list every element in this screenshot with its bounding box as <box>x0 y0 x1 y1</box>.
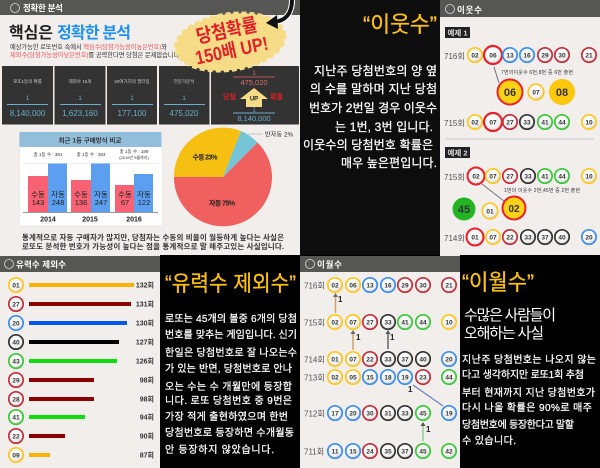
ball row: round 714: 22 <box>506 234 514 242</box>
bar chart: recent first-prize purchase method: 2014 <box>40 216 56 224</box>
pie chart: manual vs auto share: 수동 23% <box>192 154 218 162</box>
ball row: 711: 45 <box>419 448 427 456</box>
bar chart: recent first-prize purchase method: 총 1등 수 : 189 <box>120 148 149 155</box>
row: 40 <box>9 335 154 349</box>
callout: 150 times up starburst <box>172 7 288 77</box>
bar chart: recent first-prize purchase method <box>20 132 162 226</box>
ball row: 714: 20 <box>445 356 453 364</box>
row: 43: 43 <box>12 358 20 366</box>
header bar <box>0 256 160 272</box>
highlighted balls: 06 07 08: 06 <box>504 87 516 99</box>
pie chart: manual vs auto share <box>174 128 294 226</box>
ball row: 712 <box>304 406 456 420</box>
row: 41 <box>9 410 154 424</box>
ball row: round 714: 07 <box>489 234 497 242</box>
arrow: 45 repeat <box>420 422 431 441</box>
arrow: 07 repeat <box>350 330 361 350</box>
row: 27: 27 <box>12 302 20 308</box>
arrow: 45 repeat: 1 <box>426 425 431 434</box>
heading: 정확한 분석 <box>57 24 131 42</box>
row: 01: 01 <box>12 282 20 290</box>
ball row: 713: 05 <box>349 374 357 382</box>
ball row: round 714: 01 <box>471 234 479 242</box>
row: 20: 20 <box>12 320 20 328</box>
stat card: odds up <box>211 66 299 124</box>
body text: 수 있습니다. <box>462 435 516 447</box>
summary text: 로또도 분석한 번호가 가능성이 높다는 점을 통계적으로 말 해주고있는 사실입니다. <box>22 241 284 251</box>
stat card: odds up: 확률 <box>270 92 283 101</box>
ball row: 713: 18 <box>384 374 392 382</box>
body text: 다고 생각하지만 로또1회 추첨 <box>462 368 584 381</box>
body text: 가 있는 반면, 당첨번호로 안나 <box>165 363 292 375</box>
ball row: round 715 example 2: 44 <box>558 174 566 180</box>
ball row: round 715: 44 <box>558 120 566 126</box>
header bar <box>0 0 300 15</box>
ball row: round 715: 33 <box>523 120 531 126</box>
chart heading: 최근 1등 구매방식 비교 <box>59 136 121 144</box>
callout: 150 times up starburst: 당첨확률 <box>194 14 259 48</box>
body text: 니다. 로또 당첨번호 중 9번은 <box>165 395 292 407</box>
ball row: round 714: 37 <box>541 234 549 242</box>
body text <box>303 64 437 170</box>
highlighted balls: 45 01 02: 01 <box>486 208 494 216</box>
body text: 로또는 45개의 볼중 6개의 당첨 <box>165 313 297 325</box>
stat card: odds up: 1 <box>252 71 256 77</box>
arrow: 07 repeat: 1 <box>356 333 361 342</box>
ball row: 716: 13 <box>366 282 374 290</box>
row: 40: 127회 <box>136 338 154 346</box>
ball row: 716: 02 <box>331 282 339 290</box>
body text: 번호를 맞추는 게임입니다. 신기 <box>165 328 297 341</box>
ball row: 716: 16 <box>384 282 392 290</box>
subheading: 수많은 사람들이 <box>464 307 556 324</box>
heading: 핵심은 <box>9 23 53 42</box>
stat card: lotto 1st odds: 로또1등의 확률 <box>13 78 42 85</box>
row: 27 <box>9 297 154 311</box>
ball row: 715: 27 <box>366 320 374 326</box>
ball row: 712: 31 <box>384 410 392 418</box>
ball row: 714 <box>304 352 456 366</box>
ball row: round 715 example 2: 07 <box>489 174 497 180</box>
arrow: up: UP <box>250 96 258 102</box>
stat card: 15 excluded numbers: 1,623,160 <box>62 109 98 118</box>
badge: example 1 <box>445 27 470 38</box>
ball row: 716: 30 <box>419 282 427 290</box>
body text: 다시 나올 확률은 90%로 매주 <box>462 402 592 414</box>
body text: 안 등장하지 않았습니다. <box>165 443 274 456</box>
body text: 당첨번호로 등장하면 수개월동 <box>165 426 294 439</box>
ball row: round 716: 716회 <box>444 52 465 61</box>
body text: 오는 수는 수 개월만에 등장합 <box>165 381 292 393</box>
ball row: 713: 44 <box>445 374 453 382</box>
ball row: 714: 01 <box>331 356 339 364</box>
highlighted balls: 45 01 02: 45 <box>458 204 470 216</box>
body text: 지난주 당첨번호는 나오지 않는 <box>462 354 596 366</box>
ball row: 712: 17 <box>331 410 339 418</box>
heading <box>9 23 131 42</box>
intro text: 예상가능한 로또번호 속에서 핵심수(당첨가능성이높은번호)와 <box>10 42 167 51</box>
row: 09: 87회 <box>140 450 154 460</box>
body text: 매우 높은편입니다. <box>341 156 437 170</box>
stat card: 50 filters: 1 <box>130 95 134 102</box>
ball row: 715: 10 <box>445 320 453 326</box>
body text: 부터 현재까지 지난 당첨번호가 <box>462 387 595 399</box>
ball row: 714: 40 <box>419 356 427 364</box>
ball row: 716: 716회 <box>304 282 325 290</box>
bar chart: recent first-prize purchase method: 수동 <box>74 190 88 199</box>
row: 22: 90회 <box>140 432 154 440</box>
ball row: 711: 42 <box>445 448 453 456</box>
bar chart: recent first-prize purchase method: 248 <box>52 198 64 207</box>
summary text: 통계적으로 자동 구매자가 많지만, 당첨자는 수동의 비율이 월등하게 높다는 사실은 <box>22 232 284 242</box>
ball row: round 716 <box>444 46 596 64</box>
header bar: 이월수 <box>317 260 342 270</box>
body text: 한일은 당첨번호로 잘 나오는수 <box>165 347 297 359</box>
ball row: 712: 33 <box>401 410 409 418</box>
row: 09: 09 <box>12 452 20 460</box>
subheading <box>464 307 556 342</box>
ball row: 711: 711회 <box>304 448 324 456</box>
panel: repeat number balls <box>300 255 460 468</box>
arrow: 19 repeat: 1 <box>408 385 413 394</box>
badge: example 2: 예제 2 <box>447 148 468 158</box>
stat card: expert analysis: 전문가분석 <box>174 78 194 85</box>
ball row: 711: 11 <box>332 448 339 456</box>
stat card: odds up: 8,140,000 <box>237 114 271 123</box>
subheading: 오해하는 사실 <box>464 325 544 342</box>
intro text <box>10 42 181 59</box>
badge: example 2 <box>445 147 470 158</box>
stat card: expert analysis: 1 <box>182 95 186 102</box>
row: 27: 131회 <box>136 300 154 308</box>
row: 09 <box>9 448 154 462</box>
ball row: 714: 07 <box>349 356 357 364</box>
row: 40: 40 <box>12 340 20 346</box>
row: 28: 28 <box>12 396 20 404</box>
ball row: round 716: 16 <box>523 52 531 60</box>
ball row: 714: 37 <box>401 356 409 364</box>
stat card: lotto 1st odds: 8,140,000 <box>10 109 46 118</box>
ball row: 715: 07 <box>349 320 357 326</box>
ball row: 715: 715회 <box>304 318 325 328</box>
row: 29: 98회 <box>140 376 154 384</box>
row: 20: 130회 <box>136 318 154 328</box>
connector line <box>482 184 504 201</box>
body text <box>165 313 297 456</box>
stat card: expert analysis: 475,020 <box>170 109 199 118</box>
ball row: 713: 23 <box>419 374 427 382</box>
ball row: 712: 19 <box>445 410 453 418</box>
highlighted balls: 45 01 02: 02 <box>508 204 520 215</box>
highlighted balls: 06 07 08 <box>498 79 575 105</box>
ball row: 711: 24 <box>366 448 374 456</box>
heading: “이월수” <box>462 270 534 295</box>
body text: 가장 적게 출현하였으며 한번 <box>165 410 288 423</box>
ball row: round 716: 30 <box>558 52 566 60</box>
ball row: round 715 example 2: 10 <box>585 174 593 180</box>
bar chart: recent first-prize purchase method: 자동 <box>51 190 65 199</box>
bar chart: recent first-prize purchase method: 수동 <box>118 190 132 199</box>
ball row: 715: 02 <box>331 320 339 326</box>
ball row: 712: 45 <box>419 410 427 418</box>
ball row: round 715 example 2 <box>444 168 596 184</box>
row: 28 <box>9 392 154 406</box>
ball row: 716 <box>304 278 456 292</box>
panel: strong excluded numbers text <box>160 256 300 468</box>
stat card: 50 filters: 50여가지의 필터링 <box>114 78 150 85</box>
bar chart: recent first-prize purchase method: 143 <box>32 198 44 207</box>
heading: “유력수 제외수” <box>165 271 296 296</box>
highlighted balls: 45 01 02 <box>452 196 526 220</box>
row: 29 <box>9 373 154 387</box>
panel: neighbour number text <box>300 0 440 255</box>
row: 29: 29 <box>12 378 20 384</box>
body text: 번호가 2번일 경우 이웃수 <box>309 101 437 115</box>
pie chart: manual vs auto share: 자동 75% <box>209 198 236 208</box>
header bar: 이웃수 <box>457 5 482 15</box>
ball row: 713 <box>304 370 456 384</box>
ball row: round 714 <box>444 228 596 246</box>
panel: repeat number text <box>460 256 600 468</box>
ball row: round 715 example 2: 715회 <box>444 173 465 182</box>
header bar: 유력수 제외수 <box>16 260 66 270</box>
ball row: round 716: 13 <box>506 52 514 60</box>
body text: 는 1번, 3번 입니다. <box>335 120 433 134</box>
ball row: 713: 19 <box>401 374 409 382</box>
stat card: expert analysis <box>159 66 210 124</box>
row: 22: 22 <box>12 434 20 440</box>
arrow: 33 repeat <box>386 330 395 349</box>
bar chart: recent first-prize purchase method: 67 <box>121 198 129 207</box>
header bar <box>300 256 460 272</box>
stat card: 50 filters: 177,100 <box>118 109 147 118</box>
ball row: round 715 example 2: 02 <box>472 174 480 180</box>
ball row: 714: 22 <box>366 356 374 364</box>
arrow: 02 repeat <box>333 293 343 313</box>
connector line <box>494 67 499 83</box>
stat card: 50 filters <box>107 66 157 124</box>
ball row: round 715: 10 <box>585 120 593 126</box>
ball row: 711: 37 <box>401 448 409 456</box>
ball row: round 715 example 2: 33 <box>524 174 532 180</box>
bar chart: recent first-prize purchase method: 122 <box>138 198 150 207</box>
row: 43 <box>9 354 154 368</box>
ball row: round 715 <box>444 113 596 131</box>
chart heading <box>20 132 162 147</box>
ball row: 715: 33 <box>384 320 392 326</box>
ball row: 714: 33 <box>384 356 392 364</box>
ball row: 716: 29 <box>401 282 409 290</box>
body text <box>462 354 596 447</box>
body text: 이웃수의 당첨번호 확률은 <box>303 138 433 152</box>
ball row: 716: 21 <box>445 282 453 290</box>
panel: neighbour number examples <box>440 0 600 255</box>
ball row: round 714: 714회 <box>444 234 465 243</box>
ball row: 713: 15 <box>366 374 374 382</box>
highlighted balls: 06 07 08: 07 <box>532 90 540 96</box>
ball row: 712: 20 <box>349 410 357 418</box>
ball row: round 714: 20 <box>585 234 593 242</box>
arrow: curved black <box>266 0 292 29</box>
row: 41: 41 <box>12 414 20 422</box>
pie chart: manual vs auto share: 반자동 2% <box>265 130 294 138</box>
ball row: round 715: 41 <box>541 120 549 126</box>
arrow: 19 repeat <box>408 385 443 406</box>
stat card: 15 excluded numbers: 제외수 15개 <box>69 78 91 85</box>
panel: strong excluded numbers chart <box>0 255 160 468</box>
stat card: 15 excluded numbers <box>54 66 106 124</box>
ball row: 712: 712회 <box>304 410 325 418</box>
row: 22 <box>9 429 154 443</box>
stat card: odds up: 당첨 <box>223 92 236 101</box>
ball row: round 714: 40 <box>558 234 566 242</box>
highlighted balls: 06 07 08: 08 <box>556 87 568 99</box>
heading: “이웃수” <box>363 12 437 37</box>
stat card: 15 excluded numbers: 1 <box>78 95 82 102</box>
ball row: round 715: 715회 <box>444 119 465 128</box>
stat card: lotto 1st odds <box>2 66 53 124</box>
ball row: round 716: 02 <box>471 52 479 60</box>
body text: 의 수를 말하며 지난 당첨 <box>310 82 437 96</box>
row: 28: 98회 <box>140 394 154 404</box>
stat card: odds up: 1 <box>252 108 256 114</box>
bar chart: recent first-prize purchase method: 총 1등 수 : 383 <box>77 151 106 158</box>
intro text: 제외수(당첨가능성이낮은번호)를 공략한다면 당첨은 문제없습니다. <box>10 50 181 59</box>
stat card: odds up: 475,020 <box>240 78 268 87</box>
ball row: 714: 714회 <box>304 356 325 364</box>
ball row: round 716: 06 <box>489 52 497 60</box>
ball row: 711: 15 <box>349 448 357 456</box>
ball row: round 714: 33 <box>524 234 532 242</box>
stat card: lotto 1st odds: 1 <box>26 95 30 102</box>
ball row: 711 <box>304 444 456 458</box>
ball row: 711: 35 <box>384 448 392 456</box>
ball row: 715 <box>304 315 456 329</box>
note: example 2: 1번의 이웃수 2번,45번 중 2번 출현 <box>504 187 580 194</box>
row: 41: 94회 <box>140 412 154 422</box>
body text: 당첨번호에 등장한다고 말할 <box>462 419 574 431</box>
bar chart: recent first-prize purchase method: 2016 <box>126 216 142 224</box>
body text: 지난주 당첨번호의 양 옆 <box>314 64 437 78</box>
row: 01 <box>9 278 154 292</box>
bar chart: recent first-prize purchase method: 136 <box>75 198 87 207</box>
bar chart: recent first-prize purchase method: (2016년 5월까지) <box>119 154 149 160</box>
ball row: 715: 44 <box>419 320 427 326</box>
ball row: 712: 30 <box>366 410 374 418</box>
row: 20 <box>9 316 154 330</box>
header bar <box>440 0 600 17</box>
ball row: 715: 41 <box>401 320 409 326</box>
bar chart: recent first-prize purchase method: 수동 <box>31 190 45 199</box>
badge: example 1: 예제 1 <box>447 28 468 38</box>
row: 43: 126회 <box>136 356 154 366</box>
header bar: 정확한 분석 <box>23 3 63 13</box>
arrow: 02 repeat: 1 <box>338 295 343 304</box>
callout: 150 times up starburst: 150배 UP! <box>193 33 270 69</box>
ball row: round 715 example 2: 27 <box>506 174 514 180</box>
bar chart: recent first-prize purchase method: 2015 <box>82 216 98 224</box>
ball row: round 715: 07 <box>489 120 497 126</box>
ball row: 713: 713회 <box>304 374 325 382</box>
summary text <box>22 232 284 251</box>
ball row: round 715: 27 <box>506 120 514 126</box>
note: example 1: 7번의이웃수 6번,8번 중 6번 출현 <box>501 69 573 76</box>
arrow: 33 repeat: 1 <box>390 333 395 342</box>
ball row: round 716: 21 <box>585 52 593 60</box>
ball row: round 715: 02 <box>471 120 479 126</box>
bar chart: recent first-prize purchase method: 자동 <box>137 190 151 199</box>
ball row: 716: 06 <box>349 282 357 290</box>
row: 01: 132회 <box>136 280 154 290</box>
ball row: round 715 example 2: 41 <box>541 174 549 180</box>
bar chart: recent first-prize purchase method: 총 1등 수 : 391 <box>34 151 63 158</box>
panel: accurate analysis <box>0 0 300 255</box>
bar chart: recent first-prize purchase method: 247 <box>95 198 107 207</box>
ball row: 713: 02 <box>331 374 339 382</box>
ball row: round 716: 29 <box>541 52 549 60</box>
bar chart: recent first-prize purchase method: 자동 <box>94 190 108 199</box>
